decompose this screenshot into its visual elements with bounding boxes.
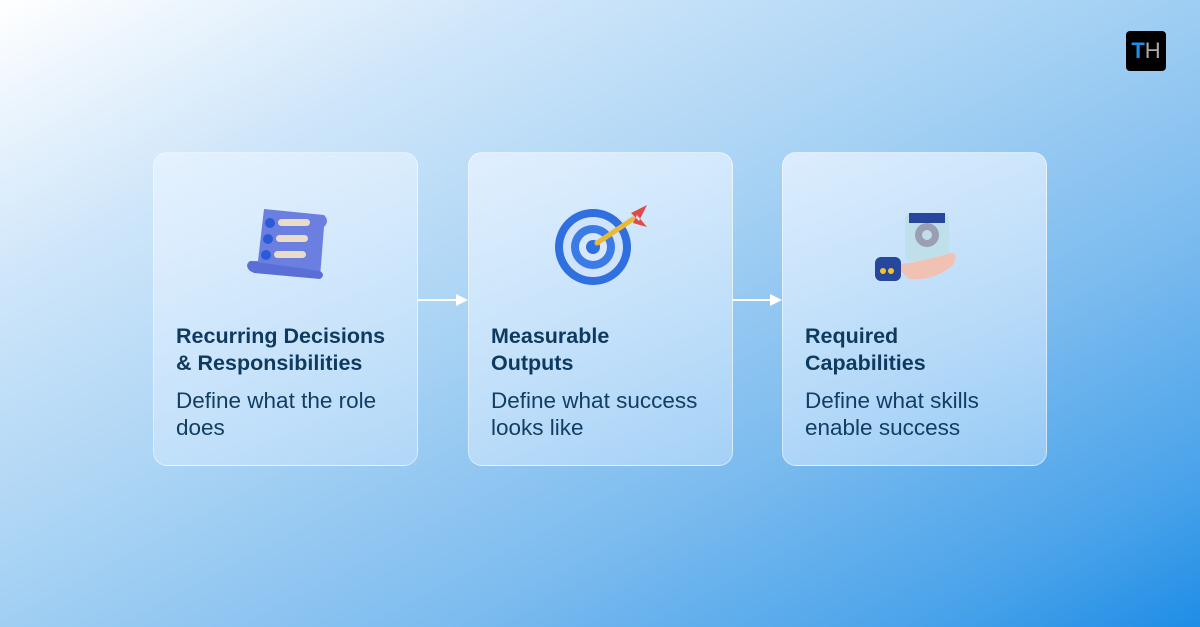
logo: TH — [1131, 38, 1161, 63]
text: Define what the role does — [176, 388, 376, 440]
text: Define what success looks like — [491, 388, 697, 440]
icon: checklist scroll — [247, 209, 327, 279]
arrow 2 — [732, 294, 782, 306]
text: Define what skills enable success — [805, 388, 979, 440]
panel: recurring decisions — [153, 152, 418, 466]
icon: target dart — [555, 205, 647, 285]
heading: Required — [805, 324, 898, 348]
arrow 1 — [418, 294, 468, 306]
icon: hand with gear box — [875, 213, 956, 281]
heading: Outputs — [491, 351, 573, 375]
panel: required capabilities — [782, 152, 1047, 466]
heading: Capabilities — [805, 351, 926, 375]
logo — [1126, 31, 1166, 71]
heading: Measurable — [491, 324, 609, 348]
panel: measurable outputs — [468, 152, 733, 466]
heading — [805, 324, 926, 375]
heading: Recurring Decisions — [176, 324, 385, 348]
heading — [491, 324, 609, 375]
heading — [176, 324, 385, 375]
heading: & Responsibilities — [176, 351, 362, 375]
